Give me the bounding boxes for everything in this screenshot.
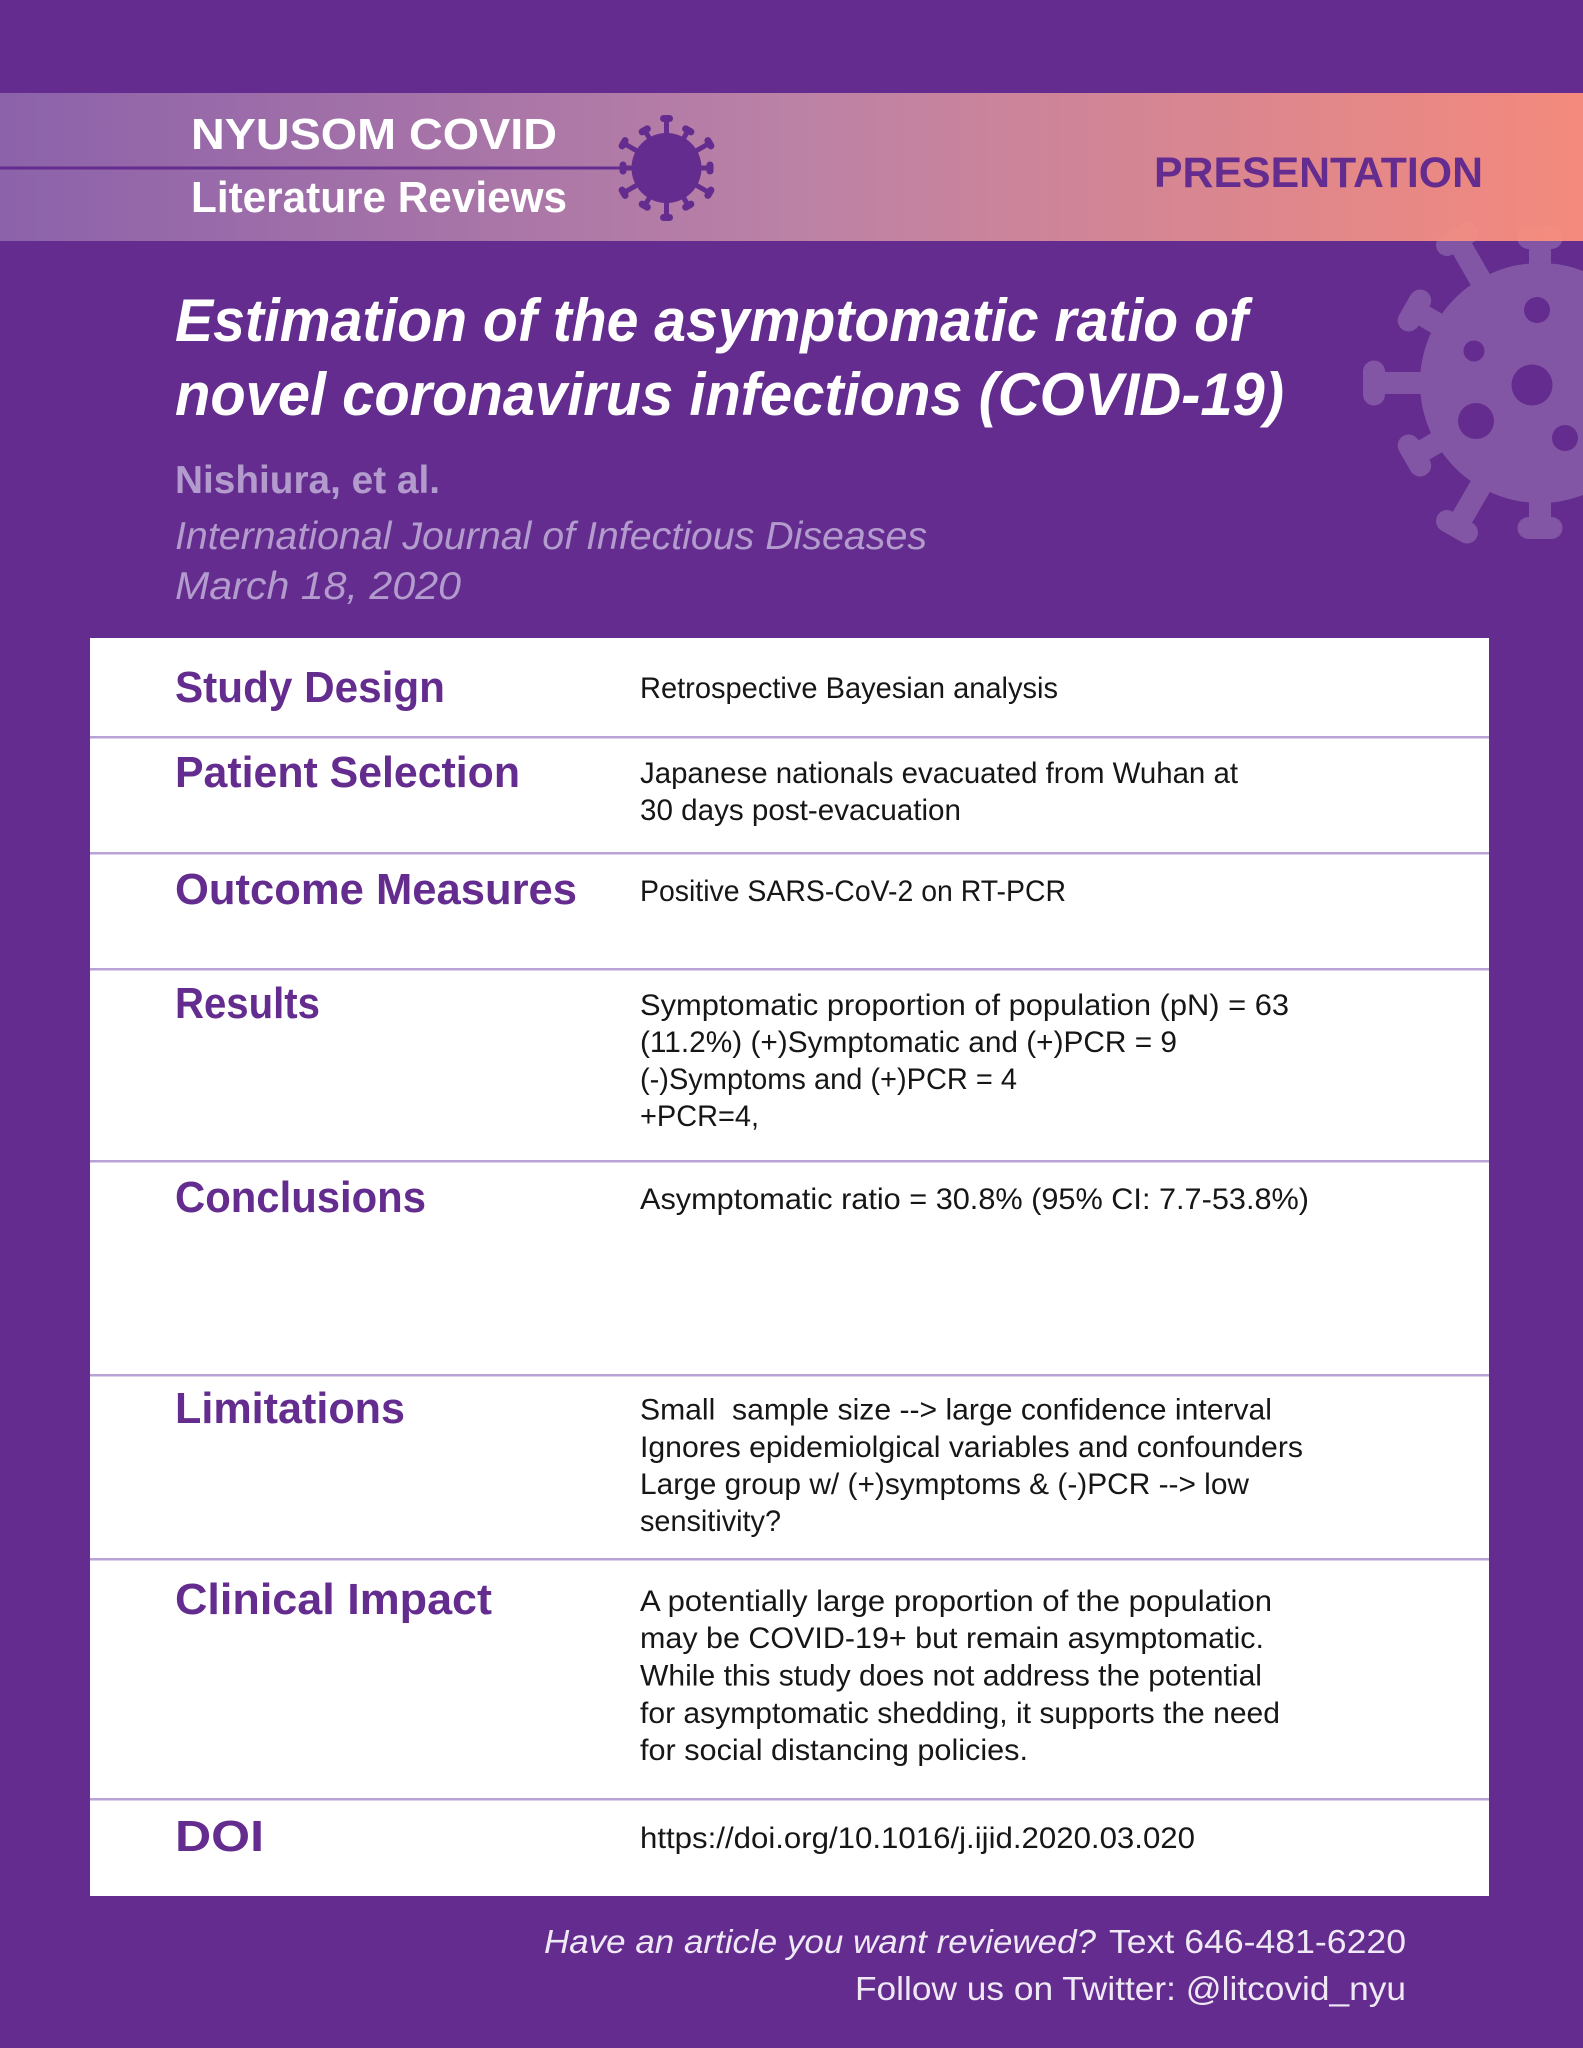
- row: clinical impact: for social distancing policies.: [640, 1734, 1028, 1767]
- row: clinical impact: A potentially large proportion of the population: [640, 1585, 1272, 1618]
- journal and date: International Journal of Infectious Diseases: [175, 515, 927, 558]
- row: limitations: [175, 1384, 1303, 1538]
- row: clinical impact: for asymptomatic shedding, it supports the need: [640, 1697, 1280, 1730]
- banner title: [191, 110, 567, 222]
- banner title: NYUSOM COVID: [191, 110, 557, 159]
- footer call to action: Text 646-481-6220: [1109, 1923, 1406, 1960]
- row: conclusions: [175, 1173, 1309, 1222]
- row: limitations: Ignores epidemiolgical variables and confounders: [640, 1431, 1303, 1464]
- row: patient selection: [175, 748, 1239, 827]
- header banner: [0, 93, 1583, 241]
- row: limitations: sensitivity?: [640, 1505, 781, 1538]
- panel: study summary table: [90, 638, 1489, 1896]
- footer call to action: [544, 1923, 1406, 2007]
- row: study design: Retrospective Bayesian analysis: [640, 672, 1058, 705]
- row: doi: https://doi.org/10.1016/j.ijid.2020.03.020: [640, 1822, 1195, 1855]
- row: conclusions: Asymptomatic ratio = 30.8% (95% CI: 7.7-53.8%): [640, 1183, 1309, 1216]
- row: results: (-)Symptoms and (+)PCR = 4: [640, 1063, 1017, 1096]
- row: results: (11.2%) (+)Symptomatic and (+)PCR = 9: [640, 1026, 1177, 1059]
- title: [175, 287, 1284, 428]
- row: doi: [175, 1812, 1195, 1861]
- row: conclusions: Conclusions: [175, 1173, 426, 1222]
- presentation label: PRESENTATION: [1154, 149, 1483, 197]
- row: patient selection: Patient Selection: [175, 748, 520, 797]
- title: Estimation of the asymptomatic ratio of: [175, 287, 1253, 354]
- row: outcome measures: Outcome Measures: [175, 865, 577, 914]
- row: results: Results: [175, 979, 320, 1028]
- journal and date: [175, 515, 927, 608]
- row: clinical impact: may be COVID-19+ but remain asymptomatic.: [640, 1622, 1264, 1655]
- banner title: Literature Reviews: [191, 173, 567, 222]
- icon: small virus: [617, 115, 716, 221]
- row: results: +PCR=4,: [640, 1100, 759, 1133]
- row: clinical impact: Clinical Impact: [175, 1575, 492, 1624]
- row: limitations: Large group w/ (+)symptoms & (-)PCR --> low: [640, 1468, 1249, 1501]
- footer call to action: Have an article you want reviewed?: [544, 1923, 1097, 1960]
- journal and date: March 18, 2020: [175, 565, 461, 608]
- row: results: [175, 979, 1289, 1133]
- row: study design: [175, 663, 1058, 712]
- authors: Nishiura, et al.: [175, 459, 440, 502]
- row: limitations: Small sample size --> large confidence interval: [640, 1394, 1272, 1426]
- icon: large virus watermark: [1363, 218, 1583, 548]
- row: limitations: Limitations: [175, 1384, 405, 1433]
- row: clinical impact: [175, 1575, 1280, 1767]
- row: doi: DOI: [175, 1812, 264, 1861]
- title: novel coronavirus infections (COVID-19): [175, 361, 1284, 428]
- footer call to action: Follow us on Twitter: @litcovid_nyu: [855, 1970, 1406, 2007]
- row: patient selection: Japanese nationals evacuated from Wuhan at: [640, 757, 1239, 790]
- row: study design: Study Design: [175, 663, 445, 712]
- row: clinical impact: While this study does not address the potential: [640, 1660, 1262, 1692]
- row: patient selection: 30 days post-evacuation: [640, 794, 961, 827]
- row: results: Symptomatic proportion of population (pN) = 63: [640, 989, 1289, 1022]
- row: outcome measures: [175, 865, 1066, 914]
- row: outcome measures: Positive SARS-CoV-2 on RT-PCR: [640, 875, 1066, 908]
